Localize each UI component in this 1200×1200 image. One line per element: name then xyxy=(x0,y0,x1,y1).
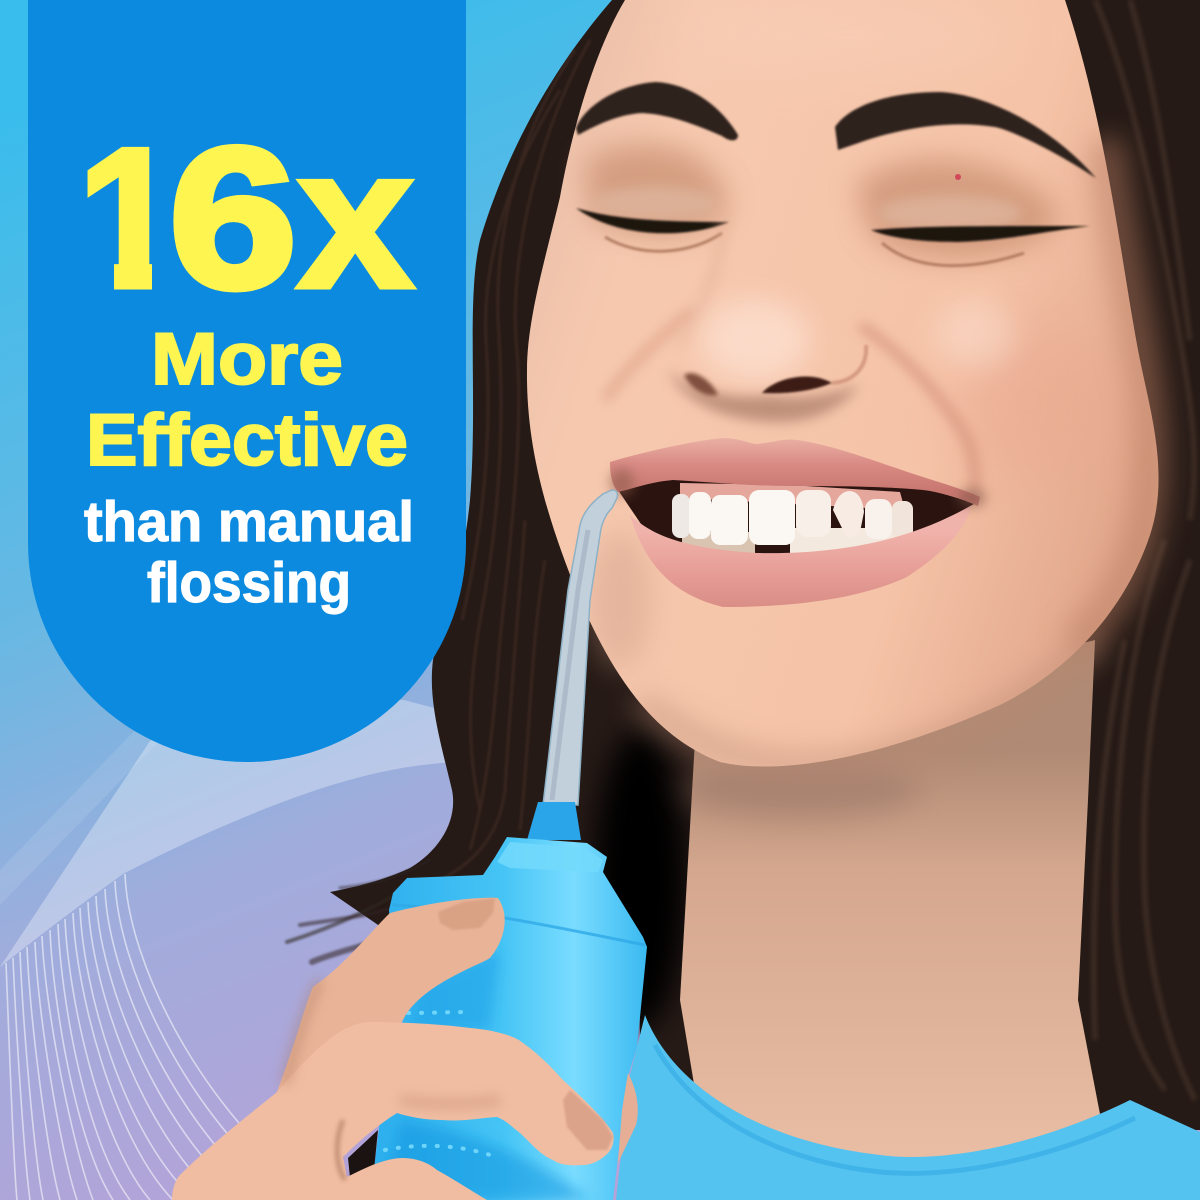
eyelid right xyxy=(878,195,1022,231)
jaw shadow xyxy=(640,640,1095,765)
eyelash left xyxy=(576,208,729,233)
nozzle tube xyxy=(543,490,617,805)
caption: flossing: flossing xyxy=(147,551,351,615)
finger shade xyxy=(400,1100,500,1104)
letter x: x xyxy=(297,107,414,330)
callout panel xyxy=(28,0,466,762)
light ribbon xyxy=(0,690,480,967)
tooth xyxy=(796,490,831,537)
hair xyxy=(330,0,1200,1130)
water flosser xyxy=(370,490,647,1200)
tooth xyxy=(749,490,795,545)
caption: than manual: than manual xyxy=(84,490,414,554)
eye socket right xyxy=(855,159,1060,260)
mouth xyxy=(610,438,986,607)
neck shadow xyxy=(680,760,920,820)
face xyxy=(527,0,1159,767)
right hair strands xyxy=(1094,0,1195,1100)
under-nose shade xyxy=(668,370,860,422)
eyelash right xyxy=(871,226,1090,242)
palm and fingers xyxy=(172,1022,614,1200)
digit 6: 6 xyxy=(169,107,297,330)
lower lid left xyxy=(605,233,722,251)
lower lid right xyxy=(882,243,1024,266)
tooth xyxy=(865,499,892,539)
tooth xyxy=(833,491,864,538)
shirt xyxy=(616,1015,1200,1200)
tooth xyxy=(711,495,748,545)
cheek crease right xyxy=(860,325,975,495)
digit 1: 1 xyxy=(77,107,182,330)
beauty mark xyxy=(955,174,961,180)
subhead: Effective: Effective xyxy=(86,400,408,481)
background wave pattern xyxy=(0,690,480,1200)
grip dots upper xyxy=(408,1012,470,1013)
upper grip shade xyxy=(410,950,500,1030)
mouth surround shade xyxy=(588,530,652,670)
flosser body xyxy=(370,837,647,1200)
left hair strands xyxy=(440,40,590,880)
tooth xyxy=(892,501,913,539)
hair wisps xyxy=(287,860,430,962)
left mouth corner xyxy=(610,468,634,496)
cheek highlight right xyxy=(935,301,1015,369)
eye socket left xyxy=(585,144,728,236)
upper teeth xyxy=(672,490,913,545)
headline: 16x xyxy=(88,144,418,292)
nose highlight xyxy=(700,300,810,380)
index finger xyxy=(277,898,505,1100)
lower body shade xyxy=(380,1120,590,1200)
fan lines xyxy=(6,874,320,1200)
eyebrow right xyxy=(835,92,1096,178)
panel shape xyxy=(28,0,466,762)
dark gap xyxy=(348,1130,378,1178)
palm crease xyxy=(337,1120,345,1180)
right mouth corner xyxy=(958,489,986,507)
far finger xyxy=(618,1073,638,1163)
nose outline right xyxy=(832,345,866,383)
cap highlight xyxy=(497,842,603,872)
thumbnail xyxy=(438,898,495,930)
nozzle inner line xyxy=(552,530,588,800)
eyelid left xyxy=(593,186,717,220)
nozzle collar xyxy=(527,802,581,840)
hand xyxy=(172,898,638,1200)
lower teeth xyxy=(682,528,898,556)
neck xyxy=(680,640,1105,1185)
upper lip xyxy=(610,438,980,506)
fingernail xyxy=(563,1090,613,1150)
knuckle shade xyxy=(285,980,320,1085)
forehead shade xyxy=(670,0,1030,75)
subhead: More: More xyxy=(151,319,343,400)
woman portrait xyxy=(287,0,1200,1200)
tooth xyxy=(672,494,690,538)
lower lip xyxy=(630,505,972,607)
shoulder band xyxy=(392,905,645,945)
nostril left xyxy=(684,373,718,396)
cheek blush right xyxy=(950,320,1110,480)
lower teeth left xyxy=(682,532,755,556)
nostril right xyxy=(762,376,832,393)
lower teeth right xyxy=(790,528,898,556)
dark hair core xyxy=(594,730,686,1030)
nose bridge shade left xyxy=(680,210,725,345)
grip dots lower xyxy=(385,1146,490,1155)
mouth interior xyxy=(618,478,975,556)
nose xyxy=(668,210,866,422)
tooth xyxy=(689,492,711,539)
faint diagonal band xyxy=(0,725,165,905)
eyebrow left xyxy=(576,82,738,140)
right face shadow xyxy=(1075,140,1150,645)
cheek crease left xyxy=(605,310,693,400)
gums xyxy=(680,483,905,510)
shirt collar xyxy=(655,1045,1135,1173)
